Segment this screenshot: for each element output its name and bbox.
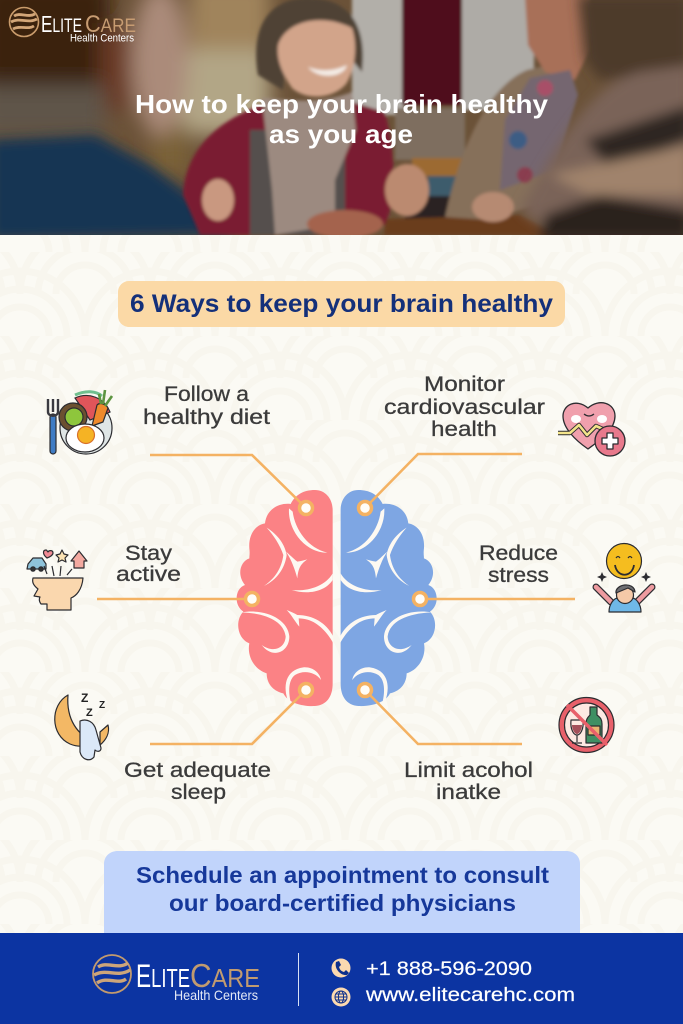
footer band: [0, 933, 683, 1024]
right hemisphere: [340, 490, 437, 706]
title: as you age: [269, 119, 413, 149]
label: limit alcohol intake: inatke: [436, 781, 501, 804]
label: limit alcohol intake: [404, 759, 533, 804]
left hemisphere: [237, 490, 333, 706]
label: get adequate sleep: sleep: [171, 781, 226, 804]
label: limit alcohol intake: Limit acohol: [404, 759, 533, 782]
icon: head with ideas: [27, 550, 87, 610]
center woman hair and face: [256, 0, 363, 90]
center woman hands: [202, 179, 234, 221]
call to action panel: Schedule an appointment to consult: [136, 862, 549, 888]
right woman: [443, 66, 550, 222]
icon: moon with sleeping z's: [55, 691, 109, 760]
icon: globe: [332, 988, 350, 1006]
label: follow a healthy diet: [143, 383, 270, 429]
footer logo: CARE: [190, 957, 260, 994]
call to action panel: [104, 851, 580, 933]
footer logo: Health Centers: [174, 987, 258, 1003]
icon: moon with sleeping z's: Z: [99, 700, 105, 711]
brain diagram: [237, 490, 437, 706]
label: stay active: active: [116, 563, 181, 586]
top logo: CARE: [85, 11, 136, 38]
call to action panel: our board-certified physicians: [169, 890, 516, 916]
icon: smiling face and cheering man: [596, 544, 652, 612]
footer logo: ELITE: [136, 958, 190, 994]
label: stay active: Stay: [125, 542, 173, 565]
top logo: Health Centers: [70, 32, 134, 44]
label: stay active: [116, 542, 181, 586]
label: get adequate sleep: Get adequate: [124, 759, 271, 782]
label: monitor cardiovascular health: Monitor: [424, 373, 505, 396]
label: reduce stress: Reduce: [479, 542, 558, 565]
label: follow a healthy diet: healthy diet: [143, 406, 270, 429]
title: [135, 89, 549, 149]
label: get adequate sleep: [124, 759, 271, 804]
icon: moon with sleeping z's: Z: [86, 707, 93, 719]
phone number: +1 888-596-2090: [366, 959, 532, 980]
top logo: [10, 8, 136, 44]
icon: healthy plate with fork: [48, 390, 112, 454]
label: follow a healthy diet: Follow a: [164, 383, 249, 406]
footer logo: [93, 955, 260, 1003]
connector lines and nodes: [97, 454, 575, 744]
label: monitor cardiovascular health: [384, 373, 545, 441]
label: reduce stress: stress: [488, 564, 549, 587]
top logo: ELITE: [41, 11, 82, 37]
icon: no alcohol sign: [559, 698, 614, 752]
heading pill: 6 Ways to keep your brain healthy: [130, 290, 553, 318]
website: www.elitecarehc.com: [365, 985, 575, 1006]
title: How to keep your brain healthy: [135, 89, 549, 119]
label: reduce stress: [479, 542, 558, 587]
header photo: seniors chatting at a table: [0, 0, 683, 240]
icon: moon with sleeping z's: Z: [81, 691, 88, 705]
label: monitor cardiovascular health: cardiovascular: [384, 396, 545, 419]
heading pill: [118, 281, 565, 327]
icon: phone: [332, 958, 350, 978]
icon: heart with ecg and plus: [558, 403, 625, 456]
red cardigan: [183, 100, 394, 235]
label: monitor cardiovascular health: health: [431, 418, 497, 441]
